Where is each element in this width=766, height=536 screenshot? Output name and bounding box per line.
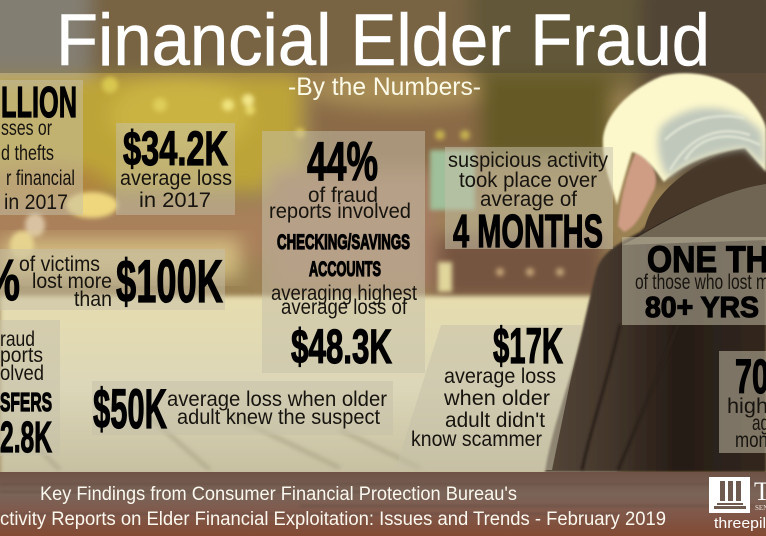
panel: 50K knew the suspect: adult knew the suspect <box>177 406 380 429</box>
background bokeh highlights <box>10 77 564 292</box>
grey hair shading <box>658 108 766 178</box>
panel: one third: 80+ YRS <box>645 292 759 324</box>
panel: victims lost more than 100K <box>0 248 225 315</box>
jacket upper back <box>622 184 766 245</box>
panel: 17K did not know scammer: average loss <box>444 365 556 388</box>
older man seen from behind <box>545 73 766 472</box>
title: Financial Elder Fraud <box>56 0 710 81</box>
jacket collar <box>644 147 766 232</box>
panel: 44 percent checking and savings <box>262 130 425 374</box>
panel: victims lost more than 100K: of victims <box>19 253 100 276</box>
panel: 50K knew the suspect: $50K <box>93 377 167 440</box>
panel: 50K knew the suspect: average loss when older <box>167 388 387 411</box>
footer source text: ctivity Reports on Elder Financial Exploitation: Issues and Trends - February 2019 <box>0 509 666 530</box>
panel: victims lost more than 100K: $100K <box>116 248 223 315</box>
panel: 17K did not know scammer: adult didn't <box>445 409 545 432</box>
panel: 50K knew the suspect <box>92 377 393 440</box>
panel: total losses: sses or <box>1 117 52 140</box>
face <box>618 152 656 232</box>
panel: 17K did not know scammer: $17K <box>493 318 563 374</box>
panel: average loss 2017: $34.2K <box>123 123 228 176</box>
panel: four months: 4 MONTHS <box>453 205 603 257</box>
panel: fraud reports transfers: raud <box>0 328 35 351</box>
panel: fraud reports transfers: SFERS <box>0 387 52 417</box>
panel: four months <box>445 147 613 257</box>
panel: fraud reports transfers: ports <box>0 344 43 367</box>
panel: 44 percent checking and savings: reports involved <box>269 200 411 223</box>
panel: 70: high <box>727 395 766 418</box>
panel: average loss 2017: average loss <box>120 167 232 190</box>
panel: fraud reports transfers: olved <box>0 362 44 385</box>
panel: 44 percent checking and savings: $48.3K <box>291 321 392 374</box>
panel: total losses: in 2017 <box>4 191 68 214</box>
panel: four months: took place over <box>459 169 597 192</box>
panel: average loss 2017 <box>116 123 235 215</box>
subtitle: -By the Numbers- <box>288 73 481 101</box>
panel: 44 percent checking and savings: of fraud <box>308 184 378 207</box>
panel: 44 percent checking and savings: CHECKING/SAVINGS <box>277 231 410 254</box>
panel: 17K did not know scammer <box>395 318 582 470</box>
panel: total losses: LLION <box>1 78 77 127</box>
panel: four months: suspicious activity <box>448 149 608 172</box>
panel: total losses: r financial <box>6 167 75 190</box>
bench wood band <box>0 472 766 536</box>
panel: 70 <box>719 351 766 453</box>
panel: four months: average of <box>480 188 577 211</box>
panel: 44 percent checking and savings: ACCOUNTS <box>309 258 381 281</box>
logo: three pillars <box>709 477 766 532</box>
panel: total losses: d thefts <box>1 142 54 165</box>
logo: three pillars: threepil <box>714 515 766 532</box>
panel: 17K did not know scammer: know scammer <box>411 428 542 451</box>
panel: fraud reports transfers: 2.8K <box>0 413 52 462</box>
panel: total losses <box>0 78 83 215</box>
panel: 44 percent checking and savings: average loss of <box>281 296 407 319</box>
panel: victims lost more than 100K: lost more <box>32 270 112 293</box>
footer source text: Key Findings from Consumer Financial Protection Bureau's <box>40 484 517 505</box>
panel: average loss 2017: in 2017 <box>139 189 211 212</box>
panel: victims lost more than 100K: than <box>74 288 112 311</box>
panel: 44 percent checking and savings: 44% <box>307 130 378 192</box>
footer source text <box>0 484 666 530</box>
panel: 17K did not know scammer: when older <box>443 387 550 410</box>
panel: fraud reports transfers <box>0 320 60 462</box>
panel: one third <box>622 237 766 325</box>
hair strands <box>665 116 760 170</box>
jacket <box>545 150 766 472</box>
hair <box>603 73 766 205</box>
jacket seam <box>582 325 678 470</box>
panel: 44 percent checking and savings: averaging highest <box>271 282 417 305</box>
